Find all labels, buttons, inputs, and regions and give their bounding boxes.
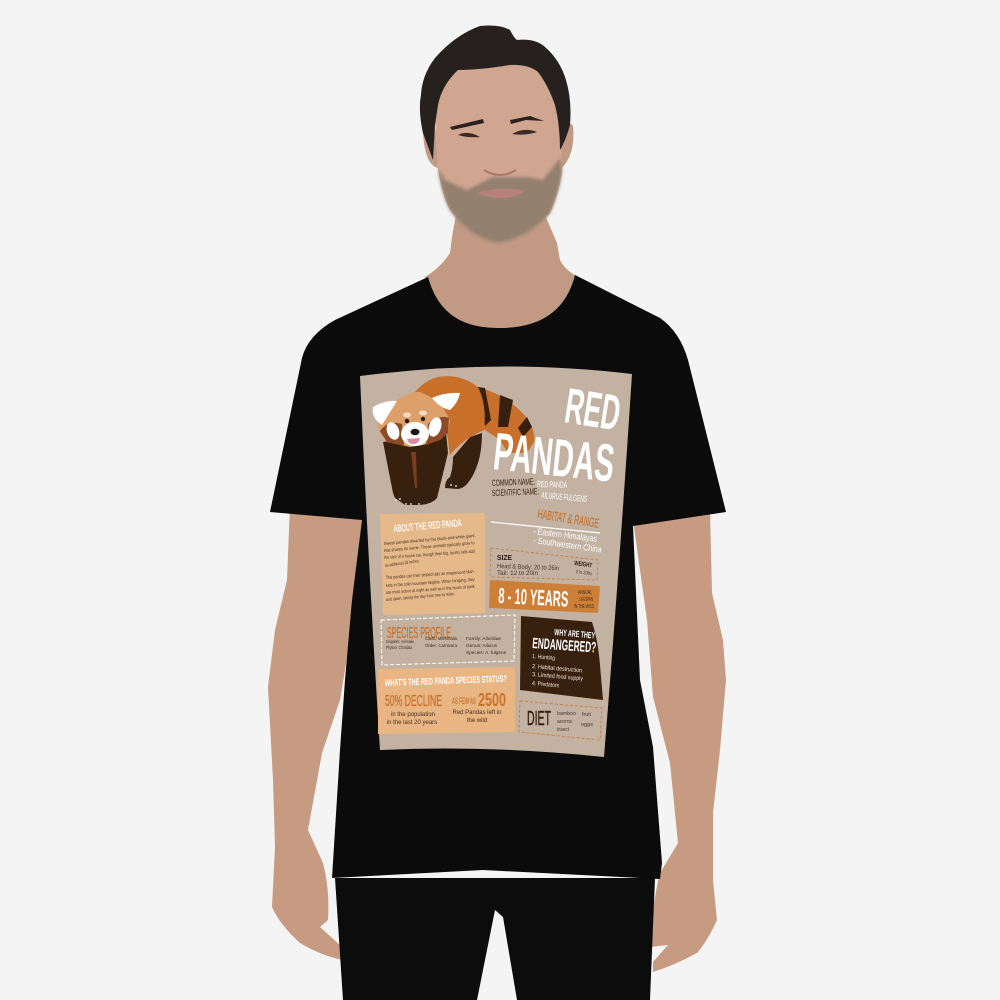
names: AILURUS FULGENS: [541, 490, 588, 504]
habitat and range: - Eastern Himalayas: [533, 526, 598, 544]
panel: size and weight: Tail: 12 to 20in: [497, 570, 538, 577]
panel: species status: the wild: [467, 718, 487, 724]
panel: diet: fruit: [582, 712, 591, 718]
panel: species profile: Class: Mammalia: [425, 636, 457, 641]
panel: about the red panda: an additional 18 inches.: [384, 558, 420, 568]
panel: diet: DIET: [527, 708, 551, 730]
panel: species profile: Order: Carnivora: [425, 643, 457, 648]
panel: about the red panda: are most active at night as well as in the hours of dusk: [386, 584, 475, 595]
claws: [396, 484, 456, 505]
panel: why are they endangered: 2. Habitat destruction: [532, 664, 582, 674]
panel: why are they endangered: [520, 616, 603, 700]
panel: diet: insect: [557, 727, 569, 733]
model: neck and head: [420, 26, 578, 335]
panel: lifespan: LIFESPAN: [579, 597, 593, 603]
habitat and range: [491, 506, 602, 555]
title: RED: [561, 378, 624, 441]
panel: lifespan: 8 - 10 YEARS: [498, 583, 569, 612]
eyes and brows: [450, 116, 544, 130]
habitat and range: HABITAT & RANGE: [537, 506, 600, 531]
panel: why are they endangered: 4. Predators: [532, 681, 559, 689]
names: COMMON NAME:: [492, 477, 535, 488]
panel: species status: in the last 20 years: [387, 720, 437, 726]
names: RED PANDA: [537, 479, 567, 490]
t-shirt: [270, 275, 726, 879]
panel: species status: WHAT'S THE RED PANDA SPECIES STATUS?: [385, 674, 507, 689]
panel: species profile: Phylum: Chordata: [386, 645, 412, 650]
illustration: red panda: [373, 376, 534, 505]
panel: why are they endangered: 1. Hunting: [532, 654, 555, 662]
names: [492, 477, 588, 504]
panel: species profile: SPECIES PROFILE: [387, 625, 451, 642]
panel: size and weight: WEIGHT: [574, 560, 593, 569]
panel: species status: 50% DECLINE: [385, 693, 442, 710]
panel: size and weight: Head & Body: 20 to 26in: [497, 563, 559, 572]
panel: species profile: Kingdom: Animalia: [386, 639, 414, 644]
front legs: [383, 432, 448, 505]
panel: species profile: [381, 615, 515, 665]
panel: why are they endangered: ENDANGERED?: [532, 635, 597, 656]
panel: species status: [378, 667, 515, 734]
panel: about the red panda: The pandas use their striped tails as wraparound blan-: [386, 569, 475, 580]
panel: about the red panda: [380, 513, 485, 615]
tail: [470, 385, 534, 453]
names: SCIENTIFIC NAME:: [492, 486, 539, 498]
panel: lifespan: IN THE WILD: [574, 604, 594, 610]
panel: diet: [519, 701, 602, 740]
panel: diet: eggs: [581, 722, 593, 728]
panel: about the red panda: that shares its name. These animals typically grow to: [384, 540, 475, 553]
ears: [373, 393, 460, 425]
panel: species status: 2500: [478, 690, 506, 710]
panel: species status: AS FEW AS: [452, 696, 476, 706]
panel: size and weight: 8 to 20lbs: [576, 569, 593, 577]
panel: lifespan: [489, 580, 600, 613]
panel: why are they endangered: WHY ARE THEY: [554, 627, 596, 641]
back leg: [445, 433, 482, 489]
panel: why are they endangered: 3. Limited food supply: [532, 672, 583, 682]
model: arms and hands: [268, 505, 726, 972]
panel: species profile: Genus: Ailurus: [466, 643, 498, 648]
title: [491, 378, 624, 494]
beard: [438, 158, 562, 243]
panel: diet: bamboo: [557, 711, 576, 717]
head: [377, 392, 450, 447]
body: [415, 376, 485, 455]
panel: species profile: Family: Ailuridae: [466, 636, 501, 641]
hair: [420, 26, 570, 160]
panel: about the red panda: ABOUT THE RED PANDA: [393, 518, 462, 535]
panel: lifespan: ANNUAL: [578, 590, 592, 596]
panel: species profile: Species: A. fulgens: [466, 650, 507, 655]
panel: size and weight: [490, 548, 598, 580]
habitat and range: - Southwestern China: [533, 535, 602, 555]
poster background: [360, 366, 632, 757]
title: PANDAS: [491, 422, 617, 494]
model: pants: [335, 878, 655, 1000]
panel: about the red panda: the size of a house cat, though their big, bushy tails add: [384, 549, 475, 560]
panel: about the red panda: and dawn, taking the day from tree to relax.: [386, 591, 455, 602]
panel: species status: in the population: [391, 712, 435, 718]
panel: about the red panda: Sweet pandas dwarfed by the black-and-white giant: [384, 533, 475, 546]
panel: about the red panda: kets in the cold mountain heights. When foraging, they: [386, 577, 475, 588]
panel: diet: acorns: [557, 719, 572, 725]
panel: species status: Red Pandas left in: [452, 710, 502, 716]
panel: size and weight: SIZE: [497, 553, 512, 562]
